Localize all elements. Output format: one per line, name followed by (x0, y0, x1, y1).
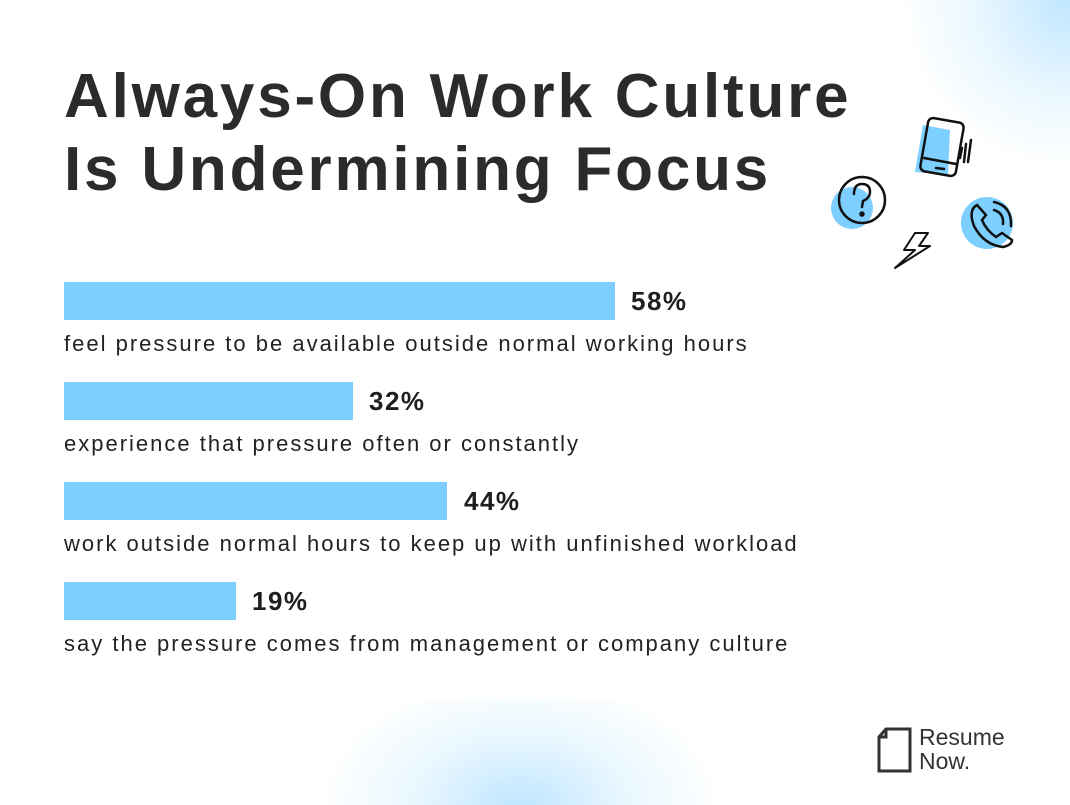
bar row 2: 32% (369, 386, 426, 416)
bar row 1 (64, 282, 749, 356)
bar row 4: 19% (252, 586, 309, 616)
bar row 1: 58% (631, 286, 688, 316)
background glow top right (890, 0, 1070, 160)
icon: call (961, 197, 1013, 249)
bar row 1: feel pressure to be available outside normal working hours (64, 331, 749, 356)
logo: Resume (919, 724, 1005, 750)
bar row 3: work outside normal hours to keep up with unfinished workload (64, 531, 799, 556)
title (64, 62, 851, 204)
bar row 3 (64, 482, 799, 556)
icons cluster (831, 116, 1014, 269)
logo (878, 724, 1005, 774)
icon: vibrating phone (915, 117, 971, 177)
bar row 2 (64, 382, 580, 456)
bar row 3: 44% (464, 486, 521, 516)
icon: lightning (895, 233, 930, 268)
bar row 4 (64, 582, 789, 656)
title: Is Undermining Focus (64, 135, 771, 204)
background glow bottom (320, 700, 720, 805)
bar row 2: experience that pressure often or constantly (64, 431, 580, 456)
title: Always-On Work Culture (64, 62, 851, 131)
bar row 4: say the pressure comes from management or company culture (64, 631, 789, 656)
icon: question mark (831, 177, 885, 229)
logo: Now. (919, 748, 970, 774)
